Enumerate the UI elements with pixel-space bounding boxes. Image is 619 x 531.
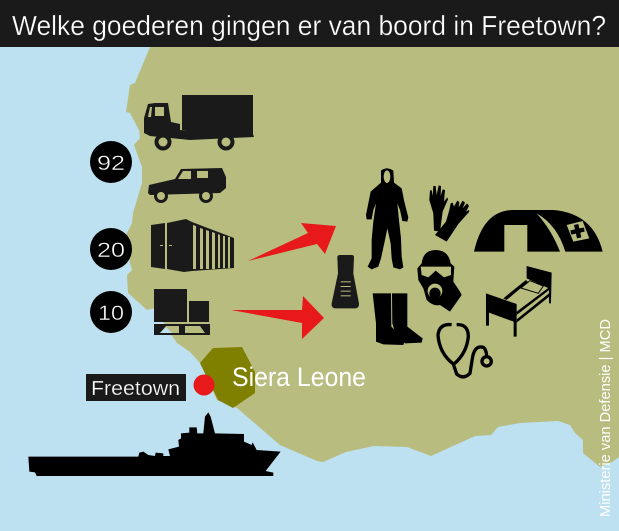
icon: stethoscope <box>438 325 491 377</box>
icon: protective suit <box>366 168 408 269</box>
credit: Ministerie van Defensie | MCD <box>598 319 614 517</box>
icon: container <box>151 219 234 272</box>
icon: flask <box>332 255 359 308</box>
badge: 92 <box>90 141 132 183</box>
label: Freetown: Freetown <box>91 378 180 400</box>
icon: pallet with boxes <box>154 289 210 335</box>
arrow: upper <box>248 223 336 261</box>
label: Siera Leone: Siera Leone <box>232 362 366 392</box>
icon: gas mask <box>417 250 462 312</box>
icon: rubber boots <box>373 293 423 345</box>
badge: 92: 92 <box>97 152 125 175</box>
marker: Freetown <box>194 374 214 396</box>
icon: ship <box>28 412 281 476</box>
icon: field tent <box>474 210 603 252</box>
title bar <box>0 0 619 47</box>
label: Freetown <box>86 374 186 401</box>
badge: 20: 20 <box>97 239 125 262</box>
arrow: lower <box>231 296 324 339</box>
icon: gloves <box>429 185 469 242</box>
map: land <box>125 47 619 467</box>
icon: jeep <box>148 168 226 203</box>
map: Sierra Leone highlight <box>200 347 255 408</box>
badge: 20 <box>90 228 132 270</box>
icon: truck <box>144 95 254 150</box>
badge: 10: 10 <box>98 302 124 325</box>
icon: hospital bed <box>486 266 552 337</box>
badge: 10 <box>90 291 132 333</box>
